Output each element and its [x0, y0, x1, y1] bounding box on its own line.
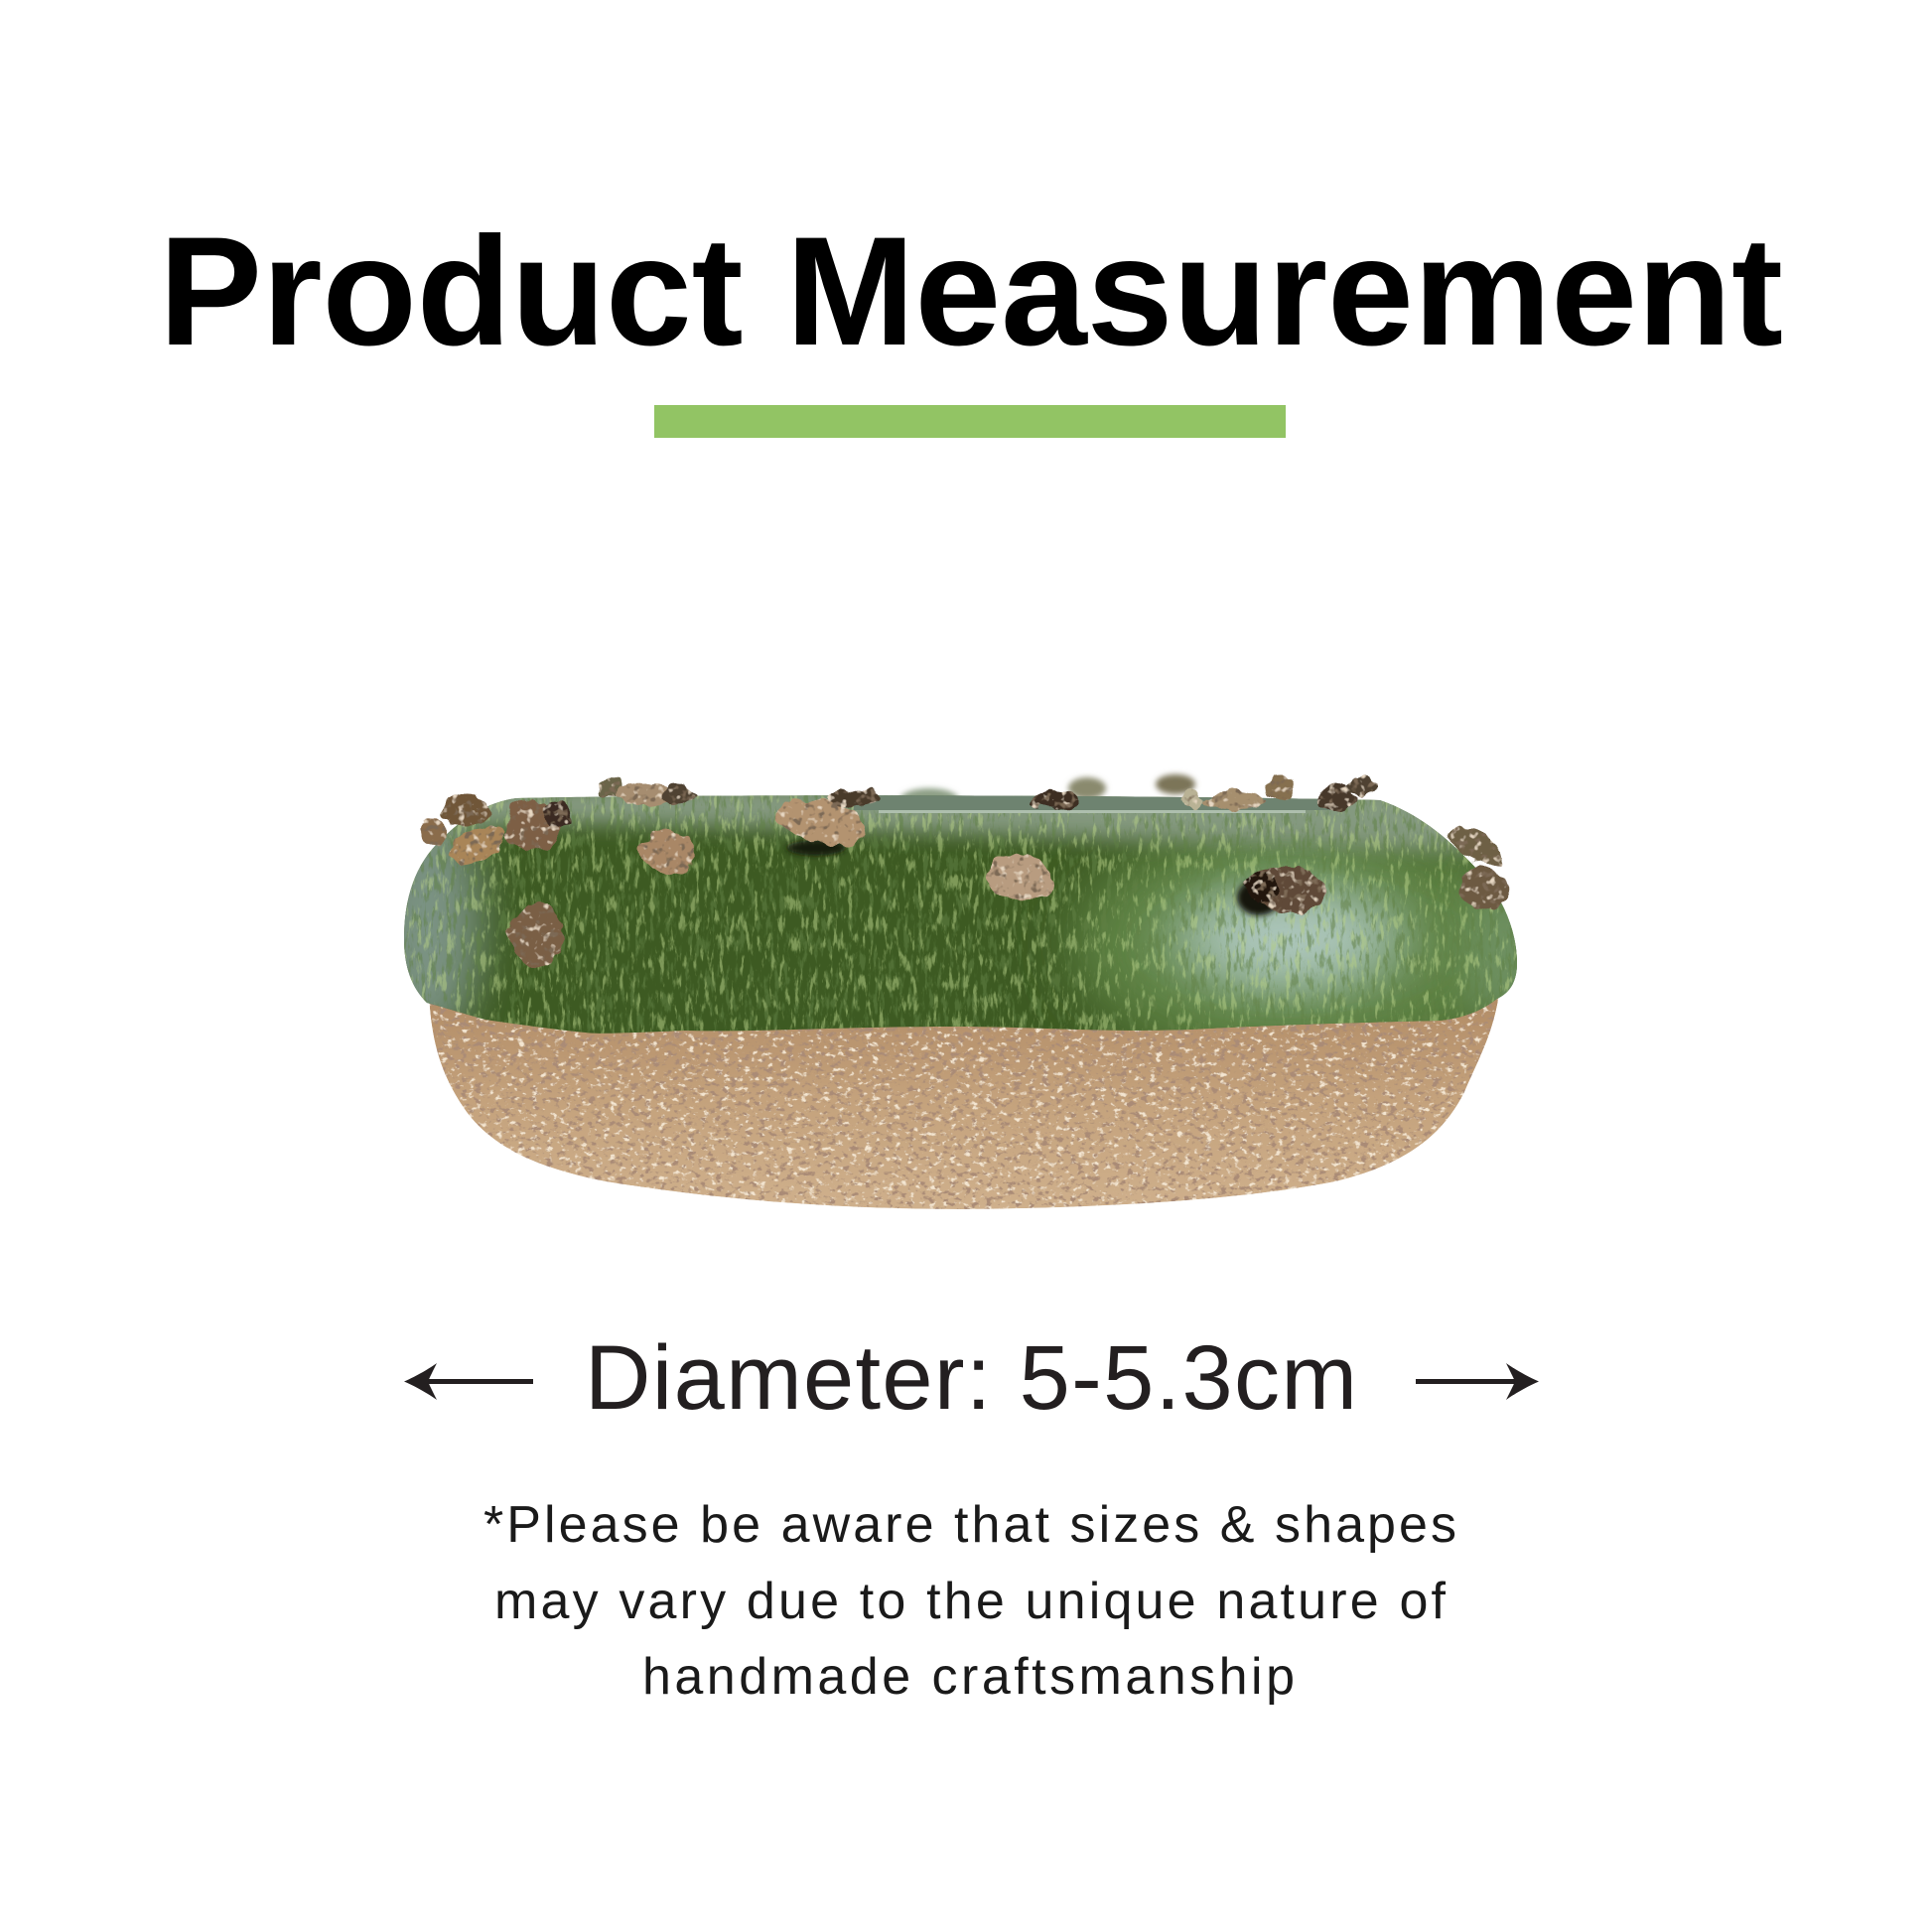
highlight core — [1204, 902, 1373, 974]
title: Product Measurement — [159, 206, 1783, 378]
far-right rim tone — [1455, 901, 1517, 1015]
front rim line — [879, 810, 1306, 813]
back rim band — [854, 795, 1330, 810]
back humps behind rim — [899, 774, 1195, 812]
grey-green left side — [404, 826, 508, 1020]
handmade size disclaimer: may vary due to the unique nature of — [494, 1573, 1447, 1630]
green accent bar — [654, 405, 1286, 438]
dimension: diameter — [404, 1327, 1539, 1429]
cork-coloured base — [429, 988, 1500, 1209]
product photo: matcha donut — [372, 774, 1539, 1209]
infographic canvas — [169, 232, 1781, 1705]
arrow: right — [1416, 1363, 1539, 1400]
handmade size disclaimer: *Please be aware that sizes & shapes — [483, 1496, 1456, 1554]
handmade size disclaimer: handmade craftsmanship — [642, 1648, 1295, 1706]
seed shadow — [1237, 880, 1281, 915]
diameter label: Diameter: 5-5.3cm — [585, 1327, 1357, 1429]
grey-green top band — [443, 795, 1470, 864]
pepper seeds — [421, 775, 1513, 968]
broad mid-green area on right — [1054, 838, 1517, 1031]
green glaze — [404, 795, 1517, 1034]
handmade size disclaimer — [483, 1496, 1456, 1706]
highlight halo — [1160, 877, 1418, 1000]
fine green streak texture — [397, 789, 1529, 1047]
arrow: left — [404, 1363, 533, 1400]
